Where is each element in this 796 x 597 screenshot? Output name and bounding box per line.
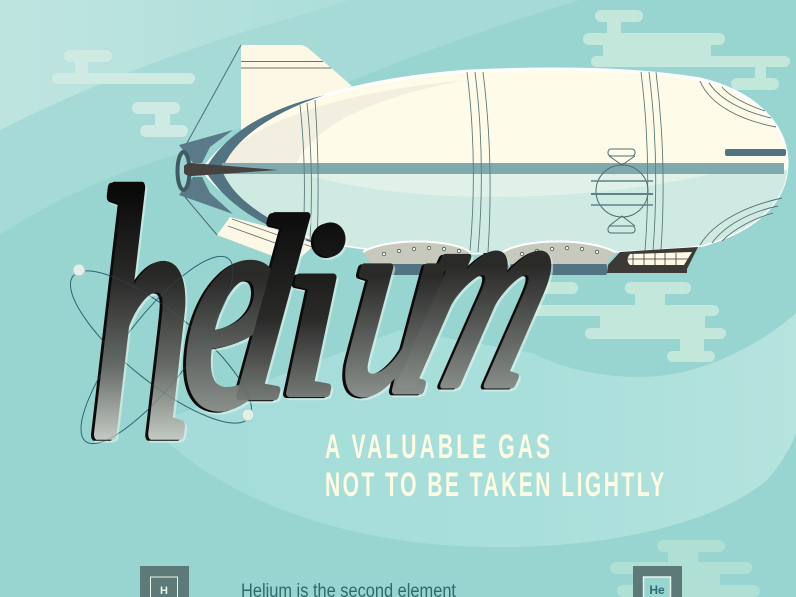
tail fin lower [217, 217, 320, 258]
word: helium: m [374, 140, 600, 444]
element tile: helium: He [649, 583, 665, 597]
subtitle [325, 427, 664, 503]
subtitle: A VALUABLE GAS [325, 427, 550, 465]
nose dash [725, 149, 786, 156]
element tile: hydrogen: H [160, 585, 168, 597]
clouds: left [52, 50, 195, 137]
hull lighter highlight [297, 172, 720, 197]
element tile: helium [633, 566, 682, 597]
clouds: below airship [530, 282, 726, 362]
gondola front [363, 242, 470, 275]
gondola window [626, 252, 692, 266]
atom electrons [73, 264, 254, 421]
element tile: hydrogen [140, 566, 189, 597]
clouds: bottom right [610, 540, 760, 597]
hull shade [215, 80, 470, 168]
centre band [222, 163, 784, 174]
atom orbits [51, 238, 271, 462]
word: helium: e [175, 141, 290, 469]
gondola rear [503, 242, 615, 275]
gondola connectors [483, 253, 512, 273]
airship [178, 45, 787, 275]
arcs [700, 81, 782, 245]
emblem [591, 149, 653, 233]
word: helium: u [328, 153, 466, 448]
rigging wires [185, 45, 241, 235]
clouds: top right [583, 10, 790, 90]
nose crescents [205, 95, 325, 244]
subtitle: NOT TO BE TAKEN LIGHTLY [325, 465, 664, 503]
atom orbits overlay [51, 238, 271, 462]
word: helium: i [274, 170, 352, 448]
word: helium: l [221, 166, 318, 453]
word: helium: h [89, 118, 195, 512]
tail fin upper [241, 45, 352, 130]
propeller [178, 152, 278, 190]
hull [203, 69, 787, 253]
struts [179, 130, 233, 214]
word: helium [89, 118, 600, 512]
ribs [300, 72, 663, 252]
hull lower half [203, 170, 787, 253]
